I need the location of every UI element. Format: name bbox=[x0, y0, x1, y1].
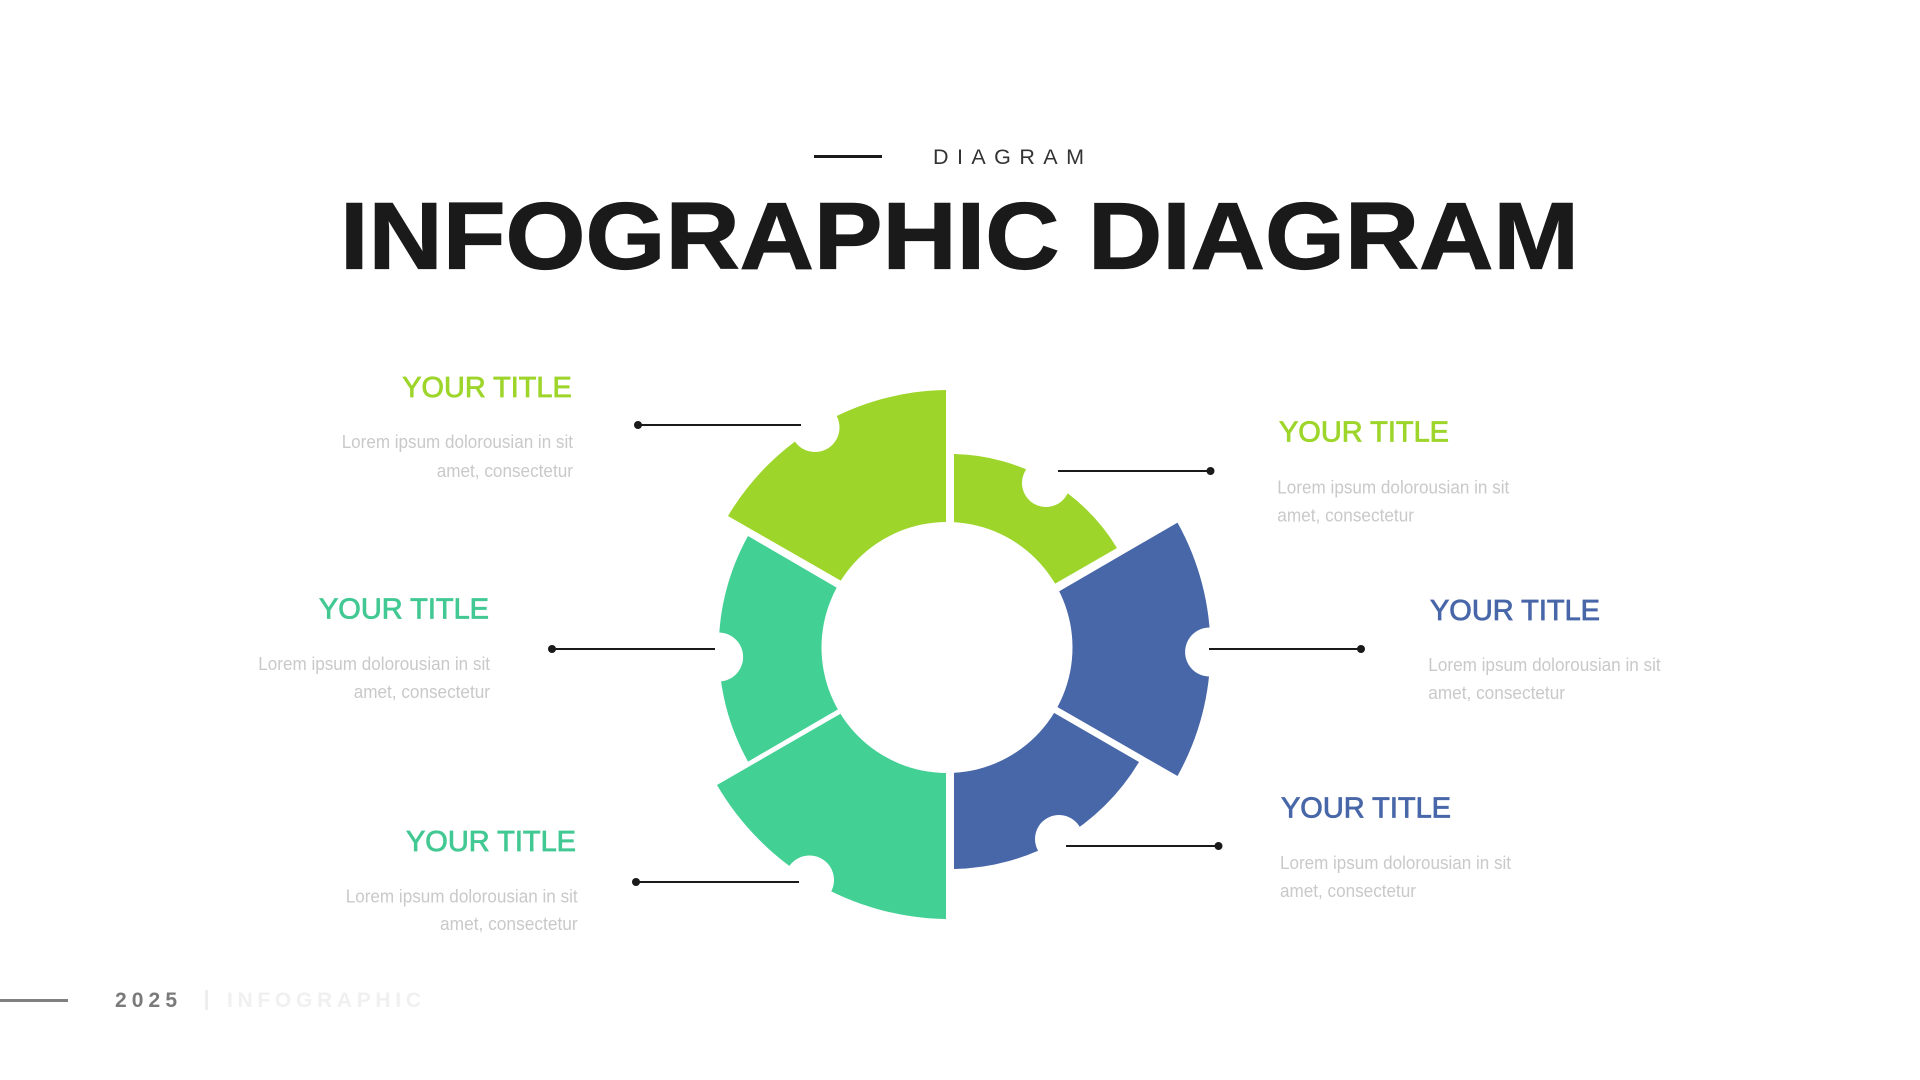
notch: left bbox=[694, 632, 743, 682]
text block: middle right: amet, consectetur bbox=[1428, 683, 1565, 703]
text block: middle left: Lorem ipsum dolorousian in sit bbox=[258, 654, 490, 674]
segment: top right, lime bbox=[954, 454, 1117, 642]
text block: middle right: YOUR TITLE bbox=[1430, 595, 1600, 627]
leader: bottom right bbox=[1066, 842, 1222, 850]
segment: left, green bbox=[719, 536, 942, 762]
segment: right, blue bbox=[958, 523, 1210, 776]
text block: middle left: amet, consectetur bbox=[354, 682, 490, 702]
segment: top left, lime bbox=[728, 390, 946, 641]
segment: bottom right, blue bbox=[954, 655, 1139, 869]
eyebrow label: DIAGRAM bbox=[933, 145, 1084, 169]
header bbox=[340, 145, 1579, 290]
text block: bottom right: YOUR TITLE bbox=[1281, 792, 1451, 824]
text block: bottom right bbox=[1280, 792, 1511, 901]
notch: top left bbox=[790, 403, 840, 452]
text block: middle right: Lorem ipsum dolorousian in sit bbox=[1428, 655, 1661, 675]
segment: bottom left, green bbox=[717, 653, 946, 919]
text block: bottom right: Lorem ipsum dolorousian in sit bbox=[1280, 853, 1511, 873]
text block: top right: Lorem ipsum dolorousian in sit bbox=[1277, 477, 1509, 497]
text block: top left: YOUR TITLE bbox=[402, 372, 572, 404]
notch: bottom right bbox=[1035, 815, 1083, 863]
header rule bbox=[814, 155, 882, 158]
notch: bottom left bbox=[785, 856, 834, 904]
text block: bottom left: amet, consectetur bbox=[440, 914, 578, 934]
leader: middle left bbox=[548, 645, 715, 653]
footer year: 2025 bbox=[115, 989, 177, 1012]
notch: right bbox=[1185, 628, 1234, 676]
footer bbox=[0, 989, 421, 1012]
footer label: INFOGRAPHIC bbox=[227, 989, 421, 1012]
leader: middle right bbox=[1209, 645, 1365, 653]
text block: top right bbox=[1277, 417, 1509, 526]
text block: top left: Lorem ipsum dolorousian in sit bbox=[342, 432, 573, 452]
text block: bottom left: Lorem ipsum dolorousian in sit bbox=[346, 886, 578, 906]
center hole bbox=[822, 522, 1072, 773]
text block: bottom left: YOUR TITLE bbox=[406, 826, 576, 858]
text block: top left bbox=[342, 372, 573, 481]
text block: bottom left bbox=[346, 826, 578, 934]
text block: top right: YOUR TITLE bbox=[1279, 417, 1449, 449]
text block: top left: amet, consectetur bbox=[437, 461, 573, 481]
text block: middle left: YOUR TITLE bbox=[319, 594, 489, 626]
text block: middle right bbox=[1428, 595, 1661, 703]
leader: top left bbox=[634, 421, 801, 429]
segmented ring diagram bbox=[694, 390, 1234, 919]
footer rule bbox=[0, 999, 68, 1002]
notch: top right bbox=[1022, 459, 1070, 507]
text block: bottom right: amet, consectetur bbox=[1280, 881, 1416, 901]
text block: top right: amet, consectetur bbox=[1277, 506, 1414, 526]
text block: middle left bbox=[258, 594, 490, 702]
footer separator bbox=[205, 990, 208, 1010]
leader: top right bbox=[1058, 467, 1214, 475]
leader: bottom left bbox=[632, 878, 799, 886]
title: INFOGRAPHIC DIAGRAM bbox=[340, 184, 1579, 290]
